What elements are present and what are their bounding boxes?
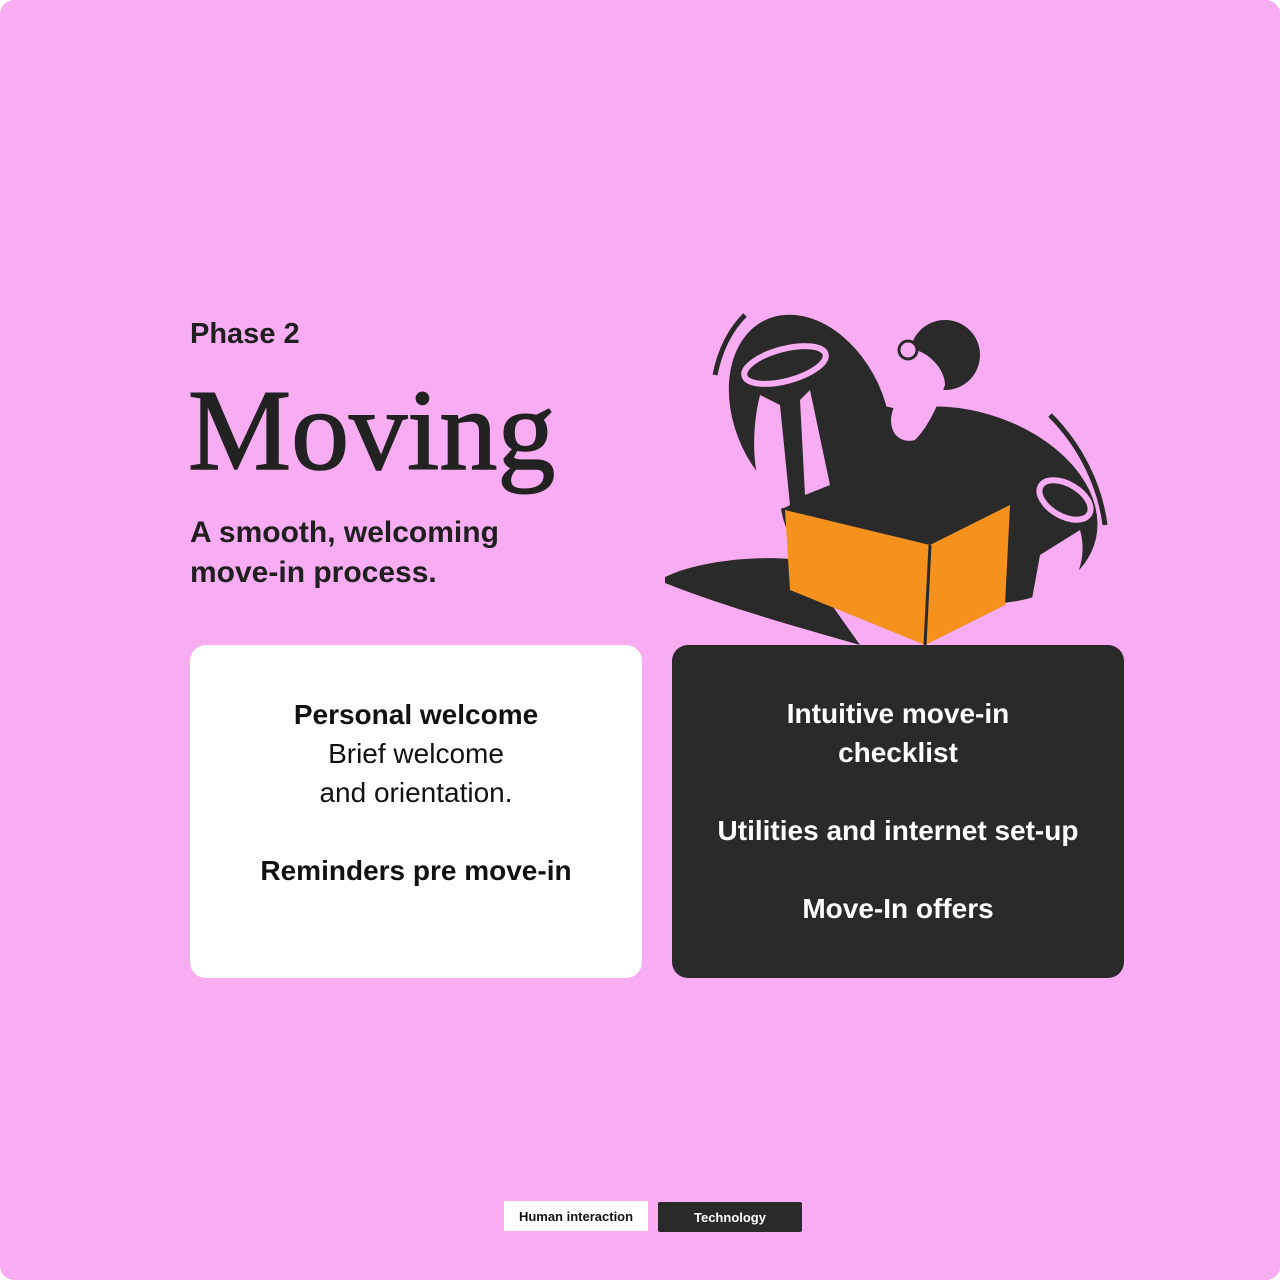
item: personal welcome: Brief welcome [328, 738, 504, 769]
legend: human interaction: Human interaction [519, 1209, 633, 1224]
item: utilities: Utilities and internet set-up [718, 815, 1078, 846]
item: personal welcome: and orientation. [319, 777, 513, 808]
legend: human interaction [504, 1201, 648, 1231]
label: phase: Phase 2 [190, 318, 300, 350]
item: personal welcome: Personal welcome [294, 699, 538, 730]
subtitle [190, 516, 499, 589]
dark body swirl [698, 288, 1120, 633]
head [891, 320, 980, 441]
legend: technology: Technology [694, 1210, 766, 1225]
subtitle: A smooth, welcoming [190, 516, 499, 549]
item: offers: Move-In offers [802, 893, 994, 924]
title: Moving [188, 367, 555, 495]
item: checklist [787, 698, 1009, 768]
legend: technology [658, 1202, 802, 1232]
panel: technology [672, 645, 1124, 978]
shadow [665, 558, 860, 645]
item: reminders: Reminders pre move-in [260, 855, 572, 886]
item: personal welcome [294, 699, 538, 808]
panel: human interaction [190, 645, 642, 978]
box [785, 505, 1010, 645]
item: checklist: checklist [838, 737, 958, 768]
item: checklist: Intuitive move-in [787, 698, 1009, 729]
subtitle: move-in process. [190, 556, 437, 589]
illustration: person unpacking box [665, 313, 1108, 645]
